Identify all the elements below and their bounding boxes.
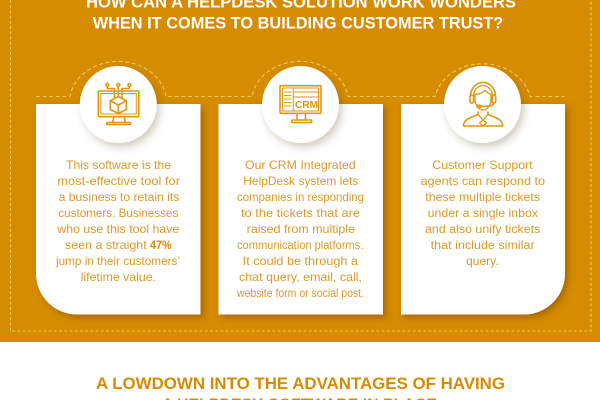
card 3 icon circle	[444, 66, 521, 143]
dashed tab outline	[36, 61, 565, 96]
card 2 text: HelpDesk system lets	[243, 175, 358, 188]
section heading: A LOWDOWN INTO THE ADVANTAGES OF HAVING	[96, 374, 505, 393]
card 2 text: It could be through a	[243, 255, 359, 268]
title: WHEN IT COMES TO BUILDING CUSTOMER TRUST?	[93, 14, 503, 32]
icon: monitor with cube	[98, 84, 139, 124]
card 3 text: under a single inbox	[428, 207, 538, 220]
panel: card 2	[218, 66, 383, 314]
card 3 text	[421, 159, 546, 268]
card 1 text: customers. Businesses	[58, 207, 178, 220]
card 3 text: these multiple tickets	[425, 191, 540, 204]
card 2 text: communication platforms.	[237, 239, 363, 252]
panel: card 3	[401, 66, 565, 314]
card 3 text: agents can respond to	[421, 175, 546, 188]
card 1 text: lifetime value.	[81, 271, 156, 284]
card 2 text: website form or social post.	[236, 287, 364, 300]
card 1 icon circle	[80, 66, 157, 143]
card 2 text: to the tickets that are	[241, 207, 360, 220]
card 2 text: raised from multiple	[247, 223, 355, 236]
card 1 text: jump in their customers’	[55, 255, 180, 268]
card 1 text	[55, 159, 180, 284]
card 3 text: and also unify tickets	[425, 223, 540, 236]
card 1 text: a business to retain its	[59, 191, 179, 204]
card 2 icon circle	[262, 66, 339, 143]
card 2 text: companies in responding	[237, 191, 364, 204]
icon: CRM monitor	[280, 86, 321, 123]
card 1 text: most-effective tool for	[57, 175, 180, 188]
card 2 text: chat query, email, call,	[239, 271, 362, 284]
card 3 text: Customer Support	[432, 159, 533, 172]
card 1 text: This software is the	[66, 159, 171, 172]
card 2 text: Our CRM Integrated	[245, 159, 356, 172]
card 1 text: seen a straight	[65, 239, 147, 252]
card 3 text: query.	[466, 255, 499, 268]
title	[86, 0, 516, 32]
icon: support agent with headset	[464, 82, 503, 126]
card 3 text: that include similar	[431, 239, 535, 252]
card 1 text: 47%	[150, 239, 172, 252]
panel: card 1	[36, 66, 200, 314]
icon: CRM monitor: CRM	[295, 99, 318, 111]
card 2 text	[236, 159, 364, 300]
card 1 text: who use this tool have	[56, 223, 179, 236]
